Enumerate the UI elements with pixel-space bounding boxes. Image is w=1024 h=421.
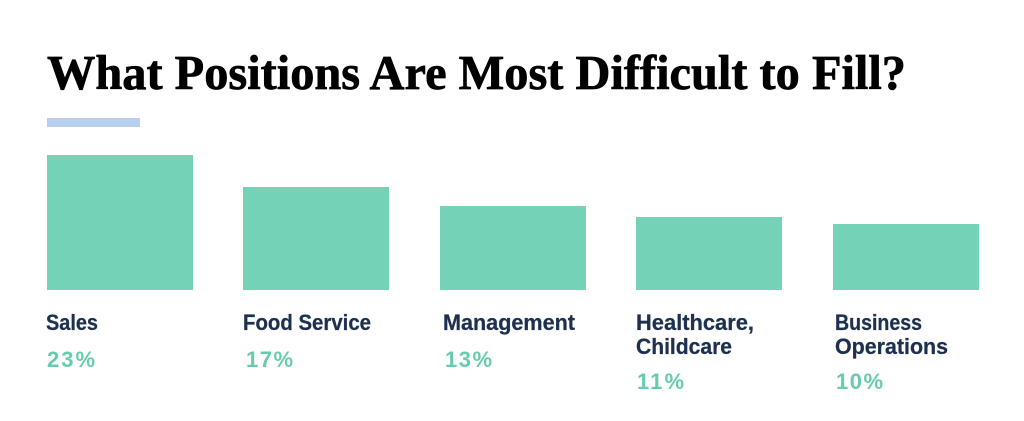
label: Healthcare, Childcare <box>636 310 754 359</box>
value: 11%: 11% <box>637 369 684 394</box>
bar: Sales <box>47 155 193 290</box>
value: 13%: 13% <box>445 347 492 372</box>
label: Business Operations: Operations <box>835 334 948 359</box>
label: Healthcare, Childcare: Healthcare, <box>636 310 754 335</box>
label: Food Service: Food Service <box>243 310 371 335</box>
column: Management <box>440 206 586 372</box>
value: 17%: 17% <box>246 347 293 372</box>
title: What Positions Are Most Difficult to Fill? <box>47 45 906 100</box>
bar: Food Service <box>243 187 389 290</box>
bar: Business Operations <box>833 224 979 290</box>
value: 23%: 23% <box>47 347 95 372</box>
value: 10%: 10% <box>836 369 883 394</box>
column: Sales <box>46 155 193 372</box>
label: Healthcare, Childcare: Childcare <box>636 334 732 359</box>
label: Sales: Sales <box>46 310 98 335</box>
label: Business Operations: Business <box>835 310 922 335</box>
title accent bar <box>47 118 140 127</box>
label: Business Operations <box>835 310 948 359</box>
column: Healthcare, Childcare <box>636 217 782 394</box>
bar: Healthcare, Childcare <box>636 217 782 290</box>
column: Food Service <box>243 187 389 372</box>
column: Business Operations <box>833 224 979 394</box>
label: Management: Management <box>443 310 576 335</box>
bar: Management <box>440 206 586 290</box>
